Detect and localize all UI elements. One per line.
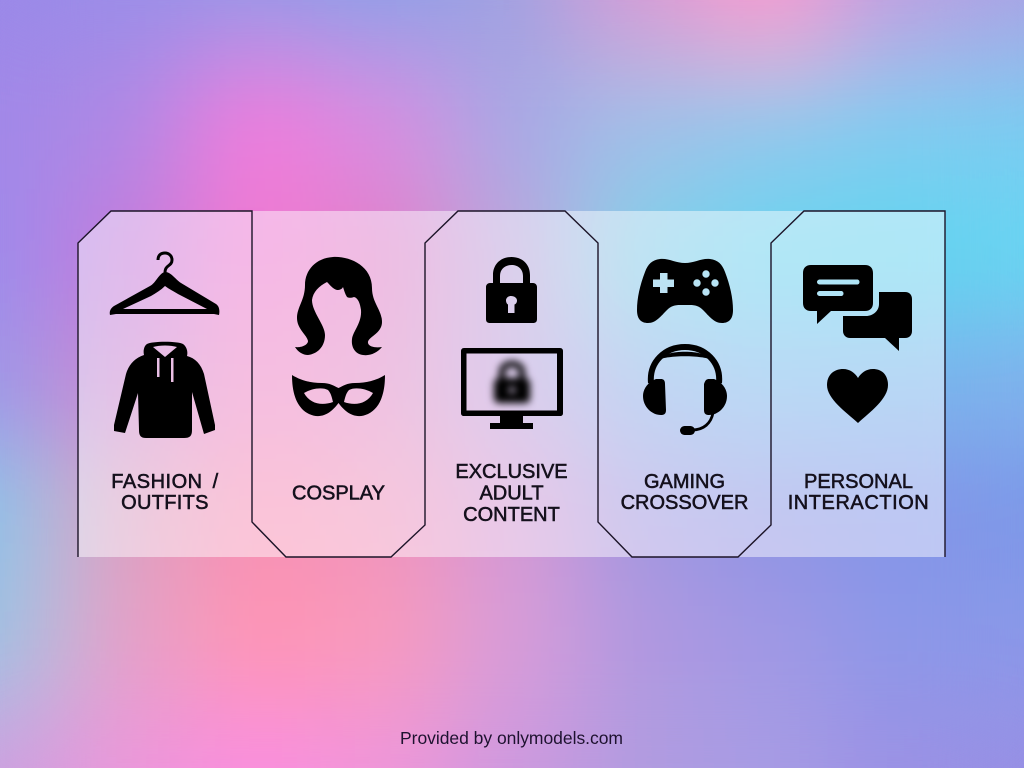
icon: headset <box>643 347 727 435</box>
label: exclusive adult content: EXCLUSIVE <box>455 461 568 483</box>
chamfered panel outlines <box>78 211 945 557</box>
icon: blurred padlock <box>494 361 530 403</box>
translucent panel band <box>78 211 945 557</box>
panel: gaming <box>621 259 748 514</box>
label: personal interaction: INTERACTION <box>788 492 929 514</box>
label: fashion: FASHION / <box>111 471 219 493</box>
label: gaming crossover: GAMING <box>644 471 725 493</box>
panel: exclusive content <box>455 257 568 526</box>
icon: padlock <box>486 257 537 323</box>
panel: personal interaction <box>788 265 929 514</box>
icon: chat bubble left <box>803 265 873 324</box>
label: personal interaction: PERSONAL <box>804 471 913 493</box>
label: cosplay: COSPLAY <box>292 482 385 504</box>
label: fashion: OUTFITS <box>121 492 209 514</box>
icon: hanger <box>110 253 219 315</box>
icon: monitor <box>461 348 563 429</box>
icon: game controller <box>637 259 733 323</box>
label: exclusive adult content: CONTENT <box>463 504 560 526</box>
label: gaming crossover: CROSSOVER <box>621 492 748 514</box>
icon: chat bubble right <box>843 292 912 351</box>
footer credit: Provided by onlymodels.com <box>400 728 623 748</box>
icon: heart <box>827 369 888 423</box>
icon: mask <box>292 375 385 416</box>
panel: fashion <box>110 253 219 514</box>
icon: wig <box>295 257 382 355</box>
label: exclusive adult content: ADULT <box>479 482 544 504</box>
icon: hoodie <box>114 342 215 438</box>
panel: cosplay <box>292 257 385 504</box>
